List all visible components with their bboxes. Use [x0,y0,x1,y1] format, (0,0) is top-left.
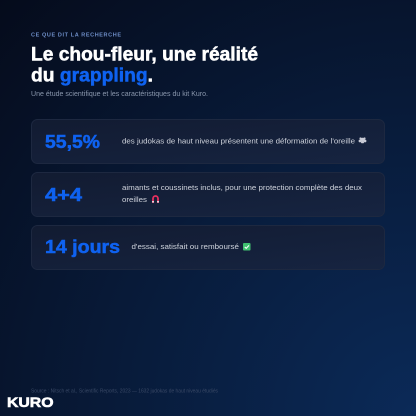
logo: KURO: KURO [7,394,54,410]
panel: stat 55,5% [32,120,384,164]
subtitle: Une étude scientifique et les caractéristiques du kit Kuro. [31,89,208,98]
panel: stat 14 jours [32,226,384,270]
stat description: aimants: aimants et coussinets inclus, pour une protection complète des deux [122,183,362,192]
panel: stat 4+4 [32,172,384,216]
stat description: aimants [122,183,362,204]
stat number: 55,5%: 55,5% [45,132,100,152]
icon: check mark [243,243,250,250]
source note: Source : Nitsch et al., Scientific Reports, 2023 — 1632 judokas de haut niveau étudiés [31,388,218,394]
stat number: 4+4: 4+4 [45,185,82,205]
icon: ear deformation [359,137,366,143]
title [31,44,258,86]
stat number: 14 jours: 14 jours [45,237,120,257]
stat description: oreille: des judokas de haut niveau présentent une déformation de l'oreille [122,136,355,146]
icon: magnet [152,196,159,203]
title: du grappling. [31,66,153,86]
stat description: essai: d'essai, satisfait ou remboursé [132,242,239,251]
stat description: aimants: oreilles [122,195,147,204]
title: Le chou-fleur, une réalité [31,44,258,66]
eyebrow label: CE QUE DIT LA RECHERCHE [31,32,121,38]
